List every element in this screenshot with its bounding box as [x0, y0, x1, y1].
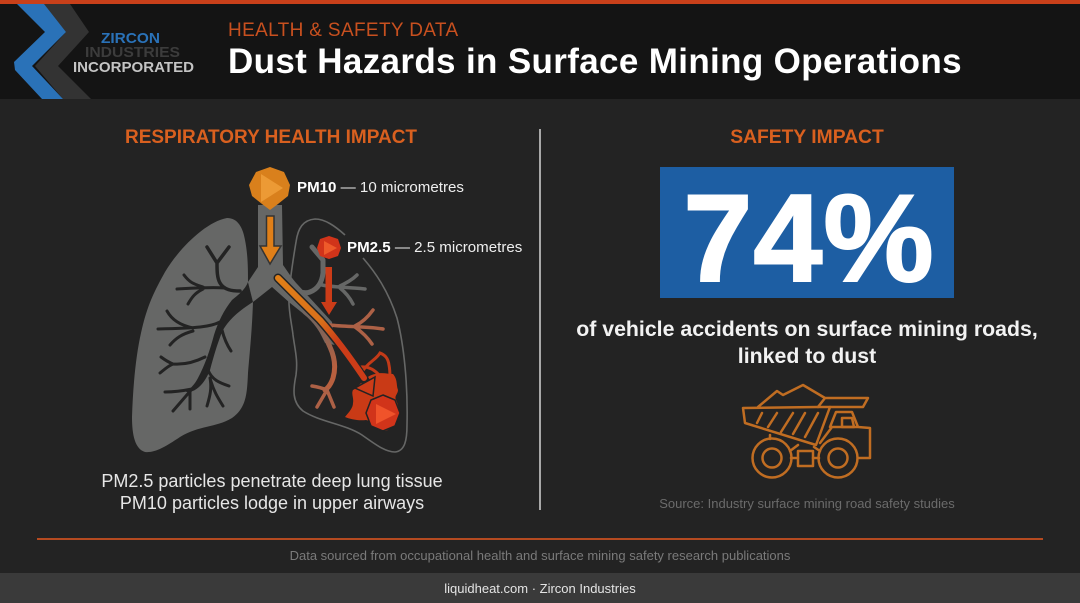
stat box — [660, 167, 954, 298]
left heading: RESPIRATORY HEALTH IMPACT — [125, 127, 417, 148]
right lung lower bronchi — [305, 310, 383, 407]
left caption: PM2.5 particles penetrate deep lung tissue — [101, 471, 443, 491]
deep particle — [366, 395, 400, 431]
data note: Data sourced from occupational health and surface mining safety research publications — [290, 548, 790, 563]
stat description — [576, 317, 1038, 368]
long arrow — [278, 278, 375, 396]
stat description: of vehicle accidents on surface mining roads, — [576, 317, 1038, 341]
right heading: SAFETY IMPACT — [730, 127, 884, 148]
footer text: liquidheat.com · Zircon Industries — [444, 581, 636, 596]
PM10 label: PM10 — 10 micrometres — [297, 179, 464, 196]
PM2.5 label: PM2.5 — 2.5 micrometres — [347, 239, 522, 256]
horizontal rule — [37, 538, 1043, 540]
logo: ZIRCON — [101, 30, 160, 47]
icon: mining truck — [742, 384, 872, 479]
footer bar — [0, 573, 1080, 603]
right lung outline — [289, 219, 407, 452]
PM2.5 particle — [317, 236, 341, 259]
vertical divider — [539, 129, 541, 510]
PM2.5 arrow — [321, 267, 337, 315]
left lung — [132, 218, 253, 452]
PM10 particle — [249, 167, 290, 210]
title: Dust Hazards in Surface Mining Operations — [228, 42, 962, 81]
header band — [0, 0, 1080, 99]
left caption — [101, 471, 443, 513]
right lung upper bronchi — [290, 247, 365, 304]
deep lung deposit — [345, 353, 399, 431]
logo — [14, 4, 194, 99]
lungs diagram — [132, 167, 408, 453]
accent bar — [0, 0, 1080, 4]
stat description: linked to dust — [738, 344, 876, 368]
PM10 arrow — [260, 216, 281, 264]
left caption: PM10 particles lodge in upper airways — [120, 493, 424, 513]
stat value: 74% — [683, 170, 935, 308]
trachea — [248, 205, 335, 345]
logo: INDUSTRIES — [85, 44, 180, 61]
source note: Source: Industry surface mining road safety studies — [659, 496, 955, 511]
logo: INCORPORATED — [73, 59, 194, 76]
eyebrow heading: HEALTH & SAFETY DATA — [228, 20, 458, 41]
